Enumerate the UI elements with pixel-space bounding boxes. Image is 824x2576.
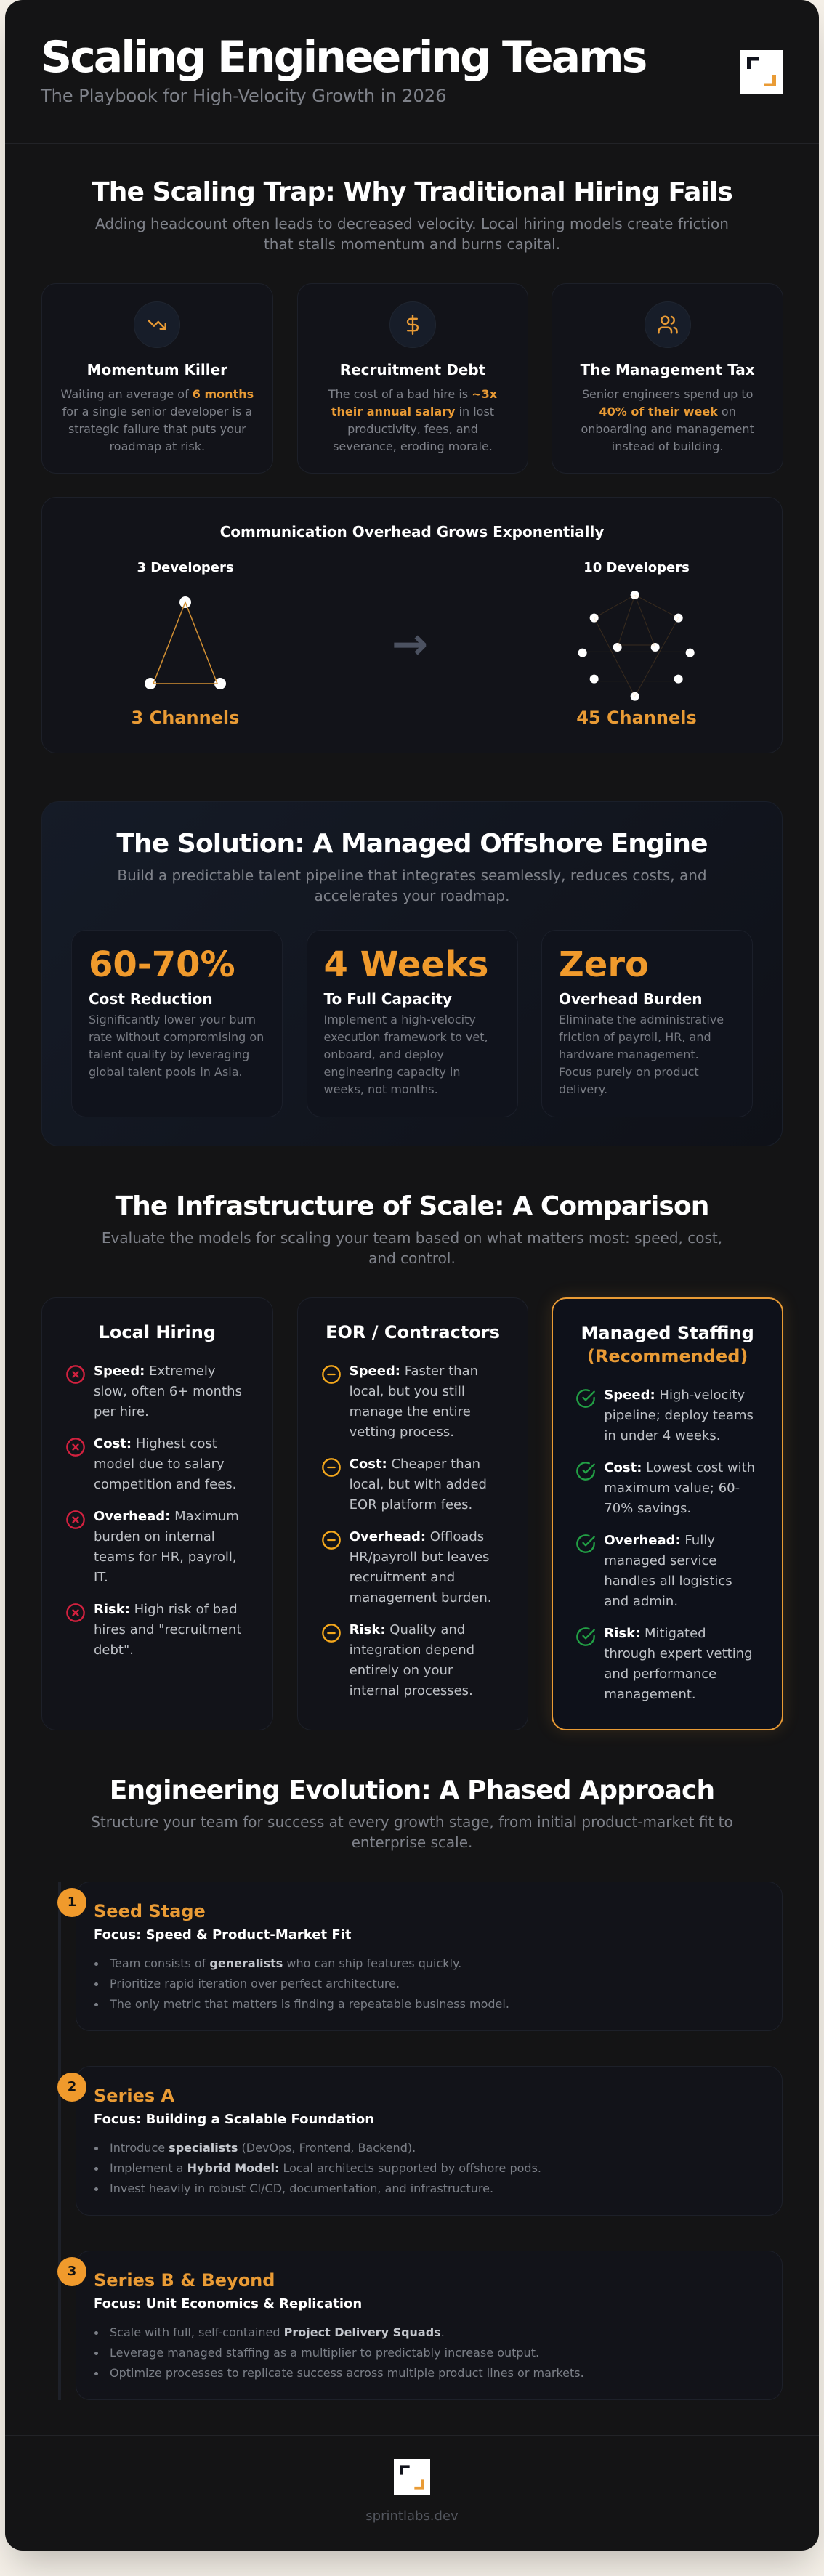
item: risk: [576, 1626, 753, 1702]
panel: communication overhead: [41, 497, 783, 753]
stat card: cost reduction: [71, 930, 283, 1117]
diagram: ten-node network: [578, 591, 695, 701]
section heading: comparison: Evaluate the models for scaling your team based on what matters most: speed, cost,: [102, 1229, 722, 1247]
panel title: Communication Overhead Grows Exponentially: [220, 523, 604, 540]
panel: seed stage: [76, 1882, 783, 2031]
stat: 3 channels: 3 Channels: [132, 708, 239, 728]
arrow: →: [392, 619, 428, 670]
phase title: Seed Stage: [94, 1901, 206, 1921]
step number: 1: [68, 1895, 76, 1910]
stat text: hardware management.: [559, 1048, 699, 1061]
footer logo: [394, 2459, 430, 2495]
phase focus: Focus: Building a Scalable Foundation: [94, 2112, 374, 2127]
section heading: engineering evolution: [91, 1775, 733, 1851]
column title: [581, 1323, 754, 1366]
stat text: [324, 1013, 488, 1096]
section heading: Build a predictable talent pipeline that integrates seamlessly, reduces costs, and: [117, 867, 707, 884]
stat number: 60-70%: [89, 944, 235, 985]
item: overhead: [322, 1529, 492, 1605]
stat number: 4 Weeks: [324, 944, 488, 985]
card title: The Management Tax: [581, 361, 755, 378]
item: cost: EOR platform fees.: [350, 1497, 472, 1512]
section heading: the scaling trap: [92, 177, 732, 253]
section heading: engineering evolution: Engineering Evolution: A Phased Approach: [110, 1775, 714, 1805]
phase bullets: [94, 2141, 541, 2195]
icon: users: [645, 301, 691, 348]
item: overhead: HR/payroll but leaves: [350, 1550, 489, 1565]
card text: Senior engineers spend up to: [582, 387, 753, 401]
step number: [57, 1888, 86, 1917]
item: risk: integration depend: [350, 1643, 474, 1658]
subtitle: The Playbook for High-Velocity Growth in 2026: [41, 86, 446, 106]
step number: 2: [68, 2079, 76, 2094]
stat label: To Full Capacity: [324, 990, 452, 1008]
section heading: The Solution: A Managed Offshore Engine: [116, 829, 708, 859]
stat text: talent quality by leveraging: [89, 1048, 249, 1061]
card text: [61, 387, 254, 453]
item: risk: debt".: [94, 1643, 134, 1658]
phase title: Series A: [94, 2086, 174, 2106]
section heading: the scaling trap: that stalls momentum and burns capital.: [264, 235, 560, 253]
item: risk: Risk: Mitigated: [604, 1626, 706, 1641]
stat card: to full capacity: [307, 930, 517, 1117]
item: overhead: IT.: [94, 1570, 108, 1585]
phase bullets: Scale with full, self-contained Project Delivery Squads.: [110, 2325, 445, 2339]
section heading: engineering evolution: enterprise scale.: [352, 1834, 472, 1851]
phase bullets: Prioritize rapid iteration over perfect architecture.: [110, 1977, 400, 1990]
card text: roadmap at risk.: [110, 440, 205, 453]
phase bullets: Optimize processes to replicate success across multiple product lines or markets.: [110, 2366, 584, 2380]
column title: Local Hiring: [99, 1322, 216, 1342]
item: speed: local, but you still: [350, 1384, 465, 1399]
item: speed: Speed: High-velocity: [604, 1388, 745, 1403]
item: risk: Risk: Quality and: [350, 1622, 465, 1637]
diagram: triangle network: [145, 596, 226, 689]
panel: recruitment debt: [297, 283, 528, 474]
header: [41, 32, 783, 106]
item: cost: competition and fees.: [94, 1477, 236, 1492]
phase bullets: Introduce specialists (DevOps, Frontend, Backend).: [110, 2141, 416, 2155]
item: overhead: teams for HR, payroll,: [94, 1550, 237, 1565]
stat text: Implement a high-velocity: [324, 1013, 476, 1026]
step number: [57, 2073, 86, 2102]
section heading: engineering evolution: Structure your team for success at every growth stage, from initial product-market fit to: [91, 1813, 733, 1831]
phase focus: Focus: Speed & Product-Market Fit: [94, 1927, 351, 1943]
phase bullets: Invest heavily in robust CI/CD, documentation, and infrastructure.: [110, 2182, 493, 2195]
phase bullets: Implement a Hybrid Model: Local architects supported by offshore pods.: [110, 2161, 541, 2175]
item: cost: 70% savings.: [604, 1501, 691, 1516]
item: risk: entirely on your: [350, 1663, 453, 1678]
stat: 45 channels: 45 Channels: [576, 708, 697, 728]
item: speed: per hire.: [94, 1404, 149, 1419]
section heading: comparison: The Infrastructure of Scale: A Comparison: [115, 1191, 709, 1221]
panel: the solution: [41, 801, 783, 1146]
stat text: weeks, not months.: [324, 1082, 438, 1096]
item: risk: management.: [604, 1687, 696, 1702]
column title: Managed Staffing: [581, 1323, 754, 1343]
item: speed: [576, 1388, 754, 1443]
item: cost: [576, 1460, 755, 1516]
panel: managed staffing recommended: [552, 1297, 783, 1730]
item: speed: pipeline; deploy teams: [604, 1408, 754, 1423]
card text: Waiting an average of 6 months: [61, 387, 254, 401]
item: overhead: [576, 1533, 732, 1609]
section heading: [116, 829, 708, 904]
phase bullets: [94, 2325, 584, 2380]
icon: dollar sign: [389, 301, 436, 348]
item: overhead: Overhead: Fully: [604, 1533, 715, 1548]
item: speed: [66, 1364, 242, 1419]
stat text: onboard, and deploy: [324, 1048, 444, 1061]
item: overhead: burden on internal: [94, 1529, 215, 1544]
item: cost: model due to salary: [94, 1457, 225, 1472]
item: overhead: management burden.: [350, 1590, 492, 1605]
stat text: rate without compromising on: [89, 1030, 264, 1044]
stat text: engineering capacity in: [324, 1065, 461, 1079]
column title: (Recommended): [587, 1346, 748, 1366]
item: overhead: and admin.: [604, 1594, 678, 1609]
card text: The cost of a bad hire is ~3x: [328, 387, 497, 401]
item: risk: [66, 1602, 241, 1658]
item: cost: Cost: Lowest cost with: [604, 1460, 755, 1475]
label: 3 developers: 3 Developers: [137, 560, 234, 575]
item: overhead: recruitment and: [350, 1570, 455, 1585]
item: risk: Risk: High risk of bad: [94, 1602, 238, 1617]
stat text: [559, 1013, 724, 1096]
item: risk: [322, 1622, 474, 1698]
stat text: friction of payroll, HR, and: [559, 1030, 711, 1044]
step number: 3: [68, 2264, 76, 2279]
footer text: sprintlabs.dev: [365, 2508, 459, 2524]
title: Scaling Engineering Teams: [41, 32, 645, 83]
footer: [365, 2459, 459, 2524]
item: overhead: managed service: [604, 1553, 716, 1568]
phase bullets: Team consists of generalists who can ship features quickly.: [110, 1956, 461, 1970]
card text: [581, 387, 754, 453]
section heading: comparison: and control.: [368, 1249, 456, 1267]
item: cost: Cost: Highest cost: [94, 1436, 217, 1451]
phase title: Series B & Beyond: [94, 2270, 275, 2291]
card text: severance, eroding morale.: [333, 440, 493, 453]
item: risk: through expert vetting: [604, 1646, 753, 1661]
stat text: Significantly lower your burn: [89, 1013, 256, 1026]
item: risk: and performance: [604, 1666, 716, 1682]
section heading: comparison: [102, 1191, 722, 1267]
stat text: execution framework to vet,: [324, 1030, 488, 1044]
stat number: Zero: [559, 944, 649, 985]
stat text: [89, 1013, 264, 1079]
card text: for a single senior developer is a: [62, 405, 252, 418]
panel: series b and beyond: [76, 2251, 783, 2400]
stat text: Focus purely on product: [559, 1065, 699, 1079]
stat label: Overhead Burden: [559, 990, 703, 1008]
item: cost: Cost: Cheaper than: [350, 1457, 480, 1472]
card text: productivity, fees, and: [347, 422, 478, 436]
card title: Recruitment Debt: [340, 361, 485, 378]
stat label: Cost Reduction: [89, 990, 213, 1008]
card text: strategic failure that puts your: [68, 422, 246, 436]
card text: onboarding and management: [581, 422, 754, 436]
stat card: overhead burden: [541, 930, 753, 1117]
stat text: global talent pools in Asia.: [89, 1065, 243, 1079]
panel: series a: [76, 2066, 783, 2216]
panel: the management tax: [552, 283, 783, 474]
timeline line: [58, 1882, 61, 2400]
icon: trending down: [134, 301, 180, 348]
logo: [740, 50, 783, 94]
card text: 40% of their week on: [599, 405, 736, 418]
column title: EOR / Contractors: [326, 1322, 500, 1342]
item: cost: [322, 1457, 487, 1512]
item: overhead: Overhead: Maximum: [94, 1509, 239, 1524]
item: cost: local, but with added: [350, 1477, 487, 1492]
card text: [328, 387, 497, 453]
panel: momentum killer: [41, 283, 273, 474]
item: speed: Speed: Faster than: [350, 1364, 478, 1379]
item: speed: manage the entire: [350, 1404, 471, 1419]
card text: their annual salary in lost: [331, 405, 494, 418]
card text: instead of building.: [612, 440, 724, 453]
item: speed: vetting process.: [350, 1425, 454, 1440]
item: cost: maximum value; 60-: [604, 1481, 740, 1496]
stat text: delivery.: [559, 1082, 607, 1096]
item: overhead: [66, 1509, 239, 1585]
item: speed: in under 4 weeks.: [604, 1428, 720, 1443]
item: overhead: handles all logistics: [604, 1573, 732, 1589]
item: speed: [322, 1364, 478, 1440]
item: overhead: Overhead: Offloads: [350, 1529, 484, 1544]
item: speed: slow, often 6+ months: [94, 1384, 242, 1399]
panel: eor contractors: [297, 1297, 528, 1730]
item: speed: Speed: Extremely: [94, 1364, 216, 1379]
section heading: accelerates your roadmap.: [315, 887, 509, 904]
phase focus: Focus: Unit Economics & Replication: [94, 2296, 362, 2312]
label: 10 developers: 10 Developers: [583, 560, 690, 575]
card title: Momentum Killer: [87, 361, 227, 378]
stat text: Eliminate the administrative: [559, 1013, 724, 1026]
panel: local hiring: [41, 1297, 273, 1730]
phase bullets: Leverage managed staffing as a multiplier to predictably increase output.: [110, 2346, 539, 2360]
phase bullets: [94, 1956, 509, 2011]
phase bullets: The only metric that matters is finding a repeatable business model.: [110, 1997, 509, 2011]
item: cost: [66, 1436, 236, 1492]
item: risk: hires and "recruitment: [94, 1622, 241, 1637]
section heading: the scaling trap: The Scaling Trap: Why Traditional Hiring Fails: [92, 177, 732, 207]
section heading: the scaling trap: Adding headcount often leads to decreased velocity. Local hiring models create friction: [95, 215, 729, 232]
step number: [57, 2257, 86, 2286]
item: risk: internal processes.: [350, 1683, 473, 1698]
